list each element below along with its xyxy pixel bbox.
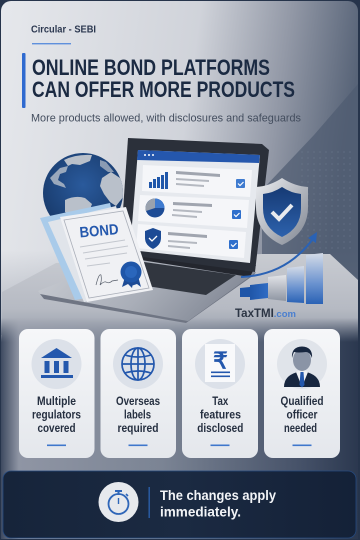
header xyxy=(22,24,301,124)
laptop screen xyxy=(130,150,260,263)
card: multiple regulators xyxy=(19,329,94,458)
card label: covered xyxy=(38,423,76,435)
card: tax features xyxy=(182,329,258,458)
hero illustration xyxy=(38,138,323,323)
back certificate xyxy=(40,203,130,300)
icon: globe grid xyxy=(122,348,154,380)
card label xyxy=(280,396,324,435)
title: ONLINE BOND PLATFORMS xyxy=(32,55,270,80)
feature cards xyxy=(19,329,340,458)
row: pie chart xyxy=(138,195,249,228)
card label: regulators xyxy=(32,410,81,422)
card label: Multiple xyxy=(37,396,76,408)
title accent bar xyxy=(22,53,26,108)
title xyxy=(32,55,295,102)
screen header bar xyxy=(137,150,260,163)
laptop keyboard xyxy=(140,262,236,295)
eyebrow underline xyxy=(32,43,71,44)
title: CAN OFFER MORE PRODUCTS xyxy=(32,77,295,102)
middle certificate xyxy=(48,206,140,302)
footer banner xyxy=(3,471,356,538)
footer message: immediately. xyxy=(160,504,241,520)
icon: officer in suit xyxy=(284,346,320,388)
row: shield xyxy=(136,224,246,258)
front certificate: BOND xyxy=(79,221,119,241)
footer message: The changes apply xyxy=(160,488,276,503)
signature xyxy=(96,275,118,285)
card: qualified officer xyxy=(264,329,340,458)
icon: rupee document: ₹ xyxy=(213,348,228,374)
card: overseas labels xyxy=(100,329,176,458)
card label: needed xyxy=(284,423,317,435)
laptop screen frame xyxy=(120,138,269,272)
card label: Tax xyxy=(212,396,229,408)
card label xyxy=(197,396,243,435)
divider xyxy=(148,487,150,518)
card label xyxy=(116,396,160,435)
laptop xyxy=(38,138,269,323)
card label: officer xyxy=(286,410,318,422)
card label: Overseas xyxy=(116,396,160,408)
row: growth chart xyxy=(142,165,252,197)
growth arrow xyxy=(241,232,317,277)
icon: security shield xyxy=(256,178,308,245)
eyebrow: Circular - SEBI: Circular - SEBI xyxy=(31,24,96,36)
card label xyxy=(32,396,81,435)
laptop base xyxy=(38,256,256,321)
brand: TaxTMI.com: TaxTMI.com xyxy=(235,308,296,320)
card label: features xyxy=(200,410,241,422)
icon: bank building xyxy=(41,348,73,378)
card label: required xyxy=(118,423,158,435)
icon: globe xyxy=(43,153,123,216)
subtitle: More products allowed, with disclosures and safeguards xyxy=(31,112,301,124)
card label: Qualified xyxy=(280,396,324,408)
card label: disclosed xyxy=(197,423,243,435)
card label: labels xyxy=(124,410,151,422)
bond certificates xyxy=(40,203,153,302)
icon: stopwatch xyxy=(98,482,138,522)
growth bar chart xyxy=(240,253,323,304)
icon: rosette seal xyxy=(120,262,142,288)
